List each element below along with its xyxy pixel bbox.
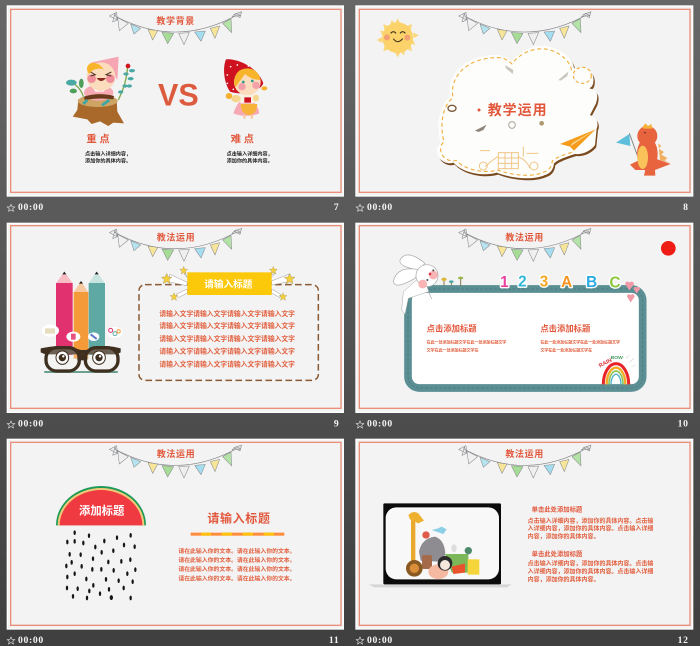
footer: 00:00 <box>18 419 44 430</box>
heading: 教法运用 <box>157 448 195 459</box>
text block 1: 点击输入详细内容，添加你的具体内容。点击输 <box>528 517 653 525</box>
section title: 教学运用 <box>488 102 548 118</box>
label: key points: 点击输入详细内容， <box>85 150 131 158</box>
panel: dashed text box: 请输入文字请输入文字请输入文字请输入文字 <box>159 334 295 343</box>
panel: dashed text box: 请输入文字请输入文字请输入文字请输入文字 <box>159 321 295 330</box>
numbers and letters: A <box>561 274 572 291</box>
banner: title with stars <box>161 266 295 300</box>
text block 1 <box>528 505 653 540</box>
laptop with animals <box>369 503 512 587</box>
panel: dashed text box: 请输入文字请输入文字请输入文字请输入文字 <box>159 359 295 368</box>
text block 1: 内容，添加你的具体内容。 <box>528 532 599 540</box>
label: difficult points: 难点 <box>231 133 257 146</box>
watermelon slice <box>56 486 146 525</box>
text block: 请在此输入你的文本。请在此输入你的文本。 <box>178 575 296 583</box>
numbers and letters: 2 <box>518 273 527 290</box>
text block 1: 入详细内容，添加你的具体内容。点击输入详细 <box>528 525 653 533</box>
label: difficult points <box>227 133 273 164</box>
panel: teal frame: 在此一处添加标题文字在此一处添加标题文字 <box>427 338 506 344</box>
text block 1: 单击此处添加标题 <box>532 505 583 514</box>
text block: 请输入标题 <box>207 511 271 526</box>
footer: 9 <box>334 419 339 430</box>
text block <box>178 511 296 583</box>
illustration: pencils and glasses <box>41 272 123 373</box>
footer: 00:00 <box>18 202 44 213</box>
icon: hearts <box>625 282 640 302</box>
label: difficult points: 点击输入详细内容， <box>227 150 273 158</box>
illustration: girl on stump <box>66 57 135 126</box>
watermelon slice: 添加标题 <box>79 504 125 518</box>
label: key points: 添加你的具体内容。 <box>85 156 131 164</box>
text block 2: 内容，添加你的具体内容。 <box>528 575 599 583</box>
footer: 00:00 <box>18 635 44 646</box>
text block 2: 入详细内容，添加你的具体内容。点击输入详细 <box>528 568 653 576</box>
slide 10: rabbit frame <box>356 223 693 430</box>
text block 2: 单击此处添加标题 <box>532 549 583 558</box>
slide 7: key and difficult points <box>7 6 343 213</box>
slide 12: laptop <box>356 439 693 646</box>
VS: VS <box>158 77 199 112</box>
watermelon seeds <box>65 530 136 600</box>
footer: 12 <box>678 635 689 646</box>
footer <box>7 635 339 646</box>
illustration: rabbit <box>393 255 438 314</box>
footer: 7 <box>334 202 339 213</box>
numbers and letters: 1 <box>500 274 509 291</box>
footer <box>356 202 689 213</box>
heading: 教法运用 <box>505 448 544 459</box>
sprouts <box>441 277 463 286</box>
footer <box>7 419 339 430</box>
panel: dashed text box: 请输入文字请输入文字请输入文字请输入文字 <box>159 347 295 356</box>
numbers and letters: 3 <box>540 274 548 291</box>
panel: teal frame: 在此一处添加标题文字在此一处添加标题文字 <box>540 338 620 344</box>
icon: paper plane <box>560 129 596 151</box>
text block: 请在此输入你的文本。请在此输入你的文本。 <box>178 556 296 564</box>
label: difficult points: 添加你的具体内容。 <box>227 156 273 164</box>
numbers and letters: B <box>586 274 597 291</box>
slide 9: pencils and text box <box>7 223 343 430</box>
panel: teal frame: 点击添加标题 <box>427 323 477 333</box>
icon: red sun <box>661 241 676 256</box>
slide 11: watermelon <box>7 439 343 646</box>
panel: cloud <box>437 46 599 180</box>
panel: teal frame: 点击添加标题 <box>540 323 591 333</box>
footer <box>356 635 689 646</box>
illustration: rainbow <box>598 355 635 384</box>
panel: dashed text box <box>139 285 318 380</box>
text block: 请在此输入你的文本。请在此输入你的文本。 <box>178 565 296 573</box>
text block: 请在此输入你的文本。请在此输入你的文本。 <box>178 547 296 555</box>
panel: dashed text box: 请输入文字请输入文字请输入文字请输入文字 <box>159 309 295 318</box>
numbers and letters <box>500 273 621 292</box>
panel: teal frame <box>408 289 643 388</box>
panel: teal frame: 文字在此一处添加标题文字在 <box>427 347 478 353</box>
heading: 教法运用 <box>505 231 544 242</box>
text block 2 <box>528 549 653 583</box>
footer <box>7 202 339 213</box>
footer: 10 <box>678 419 689 430</box>
heading: 教法运用 <box>157 232 195 243</box>
illustration: rainbow: RAIN <box>598 358 613 369</box>
banner: title with stars: 请输入标题 <box>204 279 253 291</box>
footer: 00:00 <box>367 635 393 646</box>
text block 2: 点击输入详细内容，添加你的具体内容。点击输 <box>528 560 653 568</box>
illustration: rainbow: BOW <box>611 355 623 361</box>
footer: 00:00 <box>367 419 393 430</box>
footer: 8 <box>683 202 689 213</box>
icon: sun <box>377 18 419 57</box>
footer <box>356 419 689 430</box>
illustration: girl in red hood <box>224 59 267 119</box>
footer: 11 <box>329 635 339 646</box>
heading: 教学背景 <box>156 15 195 26</box>
panel: teal frame: 文字在此一处添加标题文字在 <box>540 347 592 353</box>
numbers and letters: C <box>609 275 621 292</box>
footer: 00:00 <box>367 202 393 213</box>
illustration: dinosaur with flag <box>616 123 671 176</box>
label: key points: 重点 <box>86 133 112 146</box>
label: key points <box>85 133 131 164</box>
slide 8: section cloud <box>356 6 693 213</box>
